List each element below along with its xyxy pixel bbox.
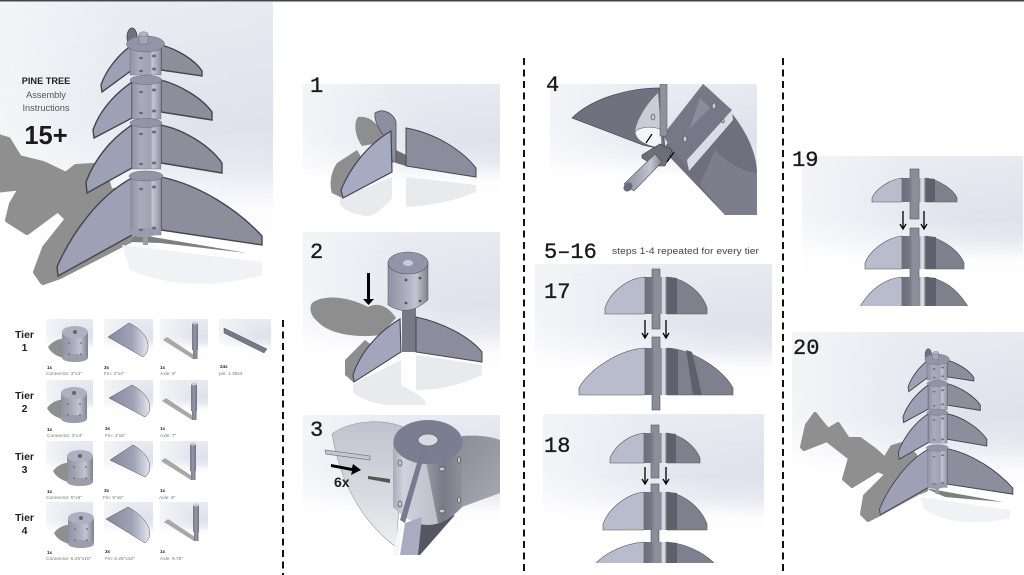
middle tier: [603, 484, 707, 544]
part captions: 1x: [47, 427, 53, 432]
row 2 parts: [46, 380, 208, 423]
small arrows: [646, 134, 674, 162]
part captions: 1x: [160, 365, 166, 370]
front fin edge strip: [400, 462, 422, 523]
panel: step 2: [303, 232, 500, 407]
6x label: 6x: [334, 474, 350, 490]
part captions: Axle: 9.75": [160, 556, 183, 562]
title block: Assembly: [26, 90, 66, 100]
arrow: down: [363, 273, 374, 305]
pine tree model: [880, 349, 1013, 515]
parts list: [15, 319, 271, 562]
tier 1 label: 1: [22, 342, 28, 354]
left back fin: [332, 422, 405, 547]
fin strip: [660, 84, 667, 136]
panel: step 1: [303, 74, 500, 223]
part captions: Connector: 6.25"x10": [46, 556, 92, 562]
part captions: Fin: 3"x4": [104, 371, 125, 377]
floor reflection: [122, 245, 262, 284]
part captions: Fin: 5"x6": [103, 495, 124, 501]
part captions: Fin: 4"x5": [105, 433, 126, 439]
cylinder body: [663, 84, 732, 167]
tier 4 label: Tier: [15, 512, 34, 524]
front fin white sliver: [393, 528, 400, 555]
part captions: 1x: [47, 550, 53, 555]
part captions: 1x: [160, 488, 166, 493]
arrows: [642, 320, 669, 338]
panel: step 18: [543, 414, 764, 570]
part captions: 1x: [47, 365, 53, 370]
step 5-16 heading: steps 1-4 repeated for every tier: [612, 246, 760, 257]
left fin: [572, 88, 665, 150]
step number: 3: [310, 418, 323, 443]
panel: step 20: [792, 332, 1024, 533]
part captions: pin: 1.35x3: [219, 371, 243, 377]
upper tier: [610, 425, 700, 478]
right fin: [416, 317, 482, 362]
row 1 parts: [46, 319, 271, 362]
shadows: [331, 117, 384, 198]
left fin: [353, 319, 401, 382]
step number: 20: [793, 336, 819, 361]
step 5-16 heading: 5–16: [544, 240, 597, 265]
inner vertical fin: [402, 300, 416, 352]
part captions: 3x: [104, 488, 110, 493]
step number: 4: [546, 73, 559, 98]
axle: [624, 154, 662, 191]
shadow: [310, 297, 396, 382]
lower right fin: [663, 84, 757, 215]
tier 2 label: 2: [22, 403, 28, 415]
arrows: [900, 211, 927, 229]
front fin face: [400, 517, 422, 555]
tier 3 label: Tier: [15, 451, 34, 463]
pine tree model: [57, 28, 262, 276]
title block: PINE TREE: [22, 76, 70, 86]
title block: Instructions: [23, 103, 70, 113]
reflections: [340, 177, 476, 216]
panel: step 3: [303, 415, 500, 555]
upper tier: [605, 269, 707, 329]
part captions: Fin: 6.25"x10": [105, 556, 135, 562]
step number: 1: [310, 74, 323, 99]
arrows: [642, 467, 669, 484]
pin: [325, 450, 370, 460]
tier 1 label: Tier: [15, 329, 34, 341]
part captions: 24x: [220, 364, 228, 369]
middle tier: [865, 228, 964, 278]
step number: 2: [310, 240, 323, 265]
top border: [0, 0, 1024, 2]
floor reflection: [920, 497, 1010, 522]
panel: finished pine tree hero: [0, 2, 273, 300]
upper tier: [872, 169, 957, 219]
lower tier: [596, 542, 714, 563]
panel: step 17: [535, 264, 772, 413]
cylinder: [393, 442, 462, 525]
lower tier: [860, 276, 968, 306]
part captions: Connector: 5"x6": [46, 495, 82, 501]
tree shadow: [802, 414, 926, 520]
hole shadow: [368, 476, 390, 483]
part captions: 3x: [104, 365, 110, 370]
title block: [22, 76, 70, 150]
right fin shadow: [925, 488, 1003, 502]
title block: 15+: [24, 122, 68, 150]
row 4 parts: [46, 502, 208, 548]
tier 4 label: 4: [22, 525, 28, 537]
right fin shadow: [130, 236, 246, 253]
part captions: Connector: 3"x4": [47, 433, 83, 439]
part captions: 1x: [47, 489, 53, 494]
panel: step 4: [546, 73, 757, 215]
left fin: [341, 131, 392, 198]
reflection: [353, 355, 482, 405]
light cylinder interior: [635, 93, 662, 140]
step number: 18: [544, 434, 570, 459]
pin bits: [642, 144, 672, 166]
connector cylinder: [388, 263, 428, 310]
part captions: Axle: 8": [159, 495, 176, 501]
part captions: 3x: [105, 549, 111, 554]
part captions: Connector: 3"x4": [46, 371, 82, 377]
part captions: Axle: 7": [160, 433, 177, 439]
tier 3 label: 3: [22, 464, 28, 476]
part captions: Axle: 6": [160, 371, 177, 377]
panel: step 19: [792, 148, 1023, 310]
arrow: right: [331, 464, 361, 475]
part captions: 3x: [105, 426, 111, 431]
tree shadow: [0, 136, 130, 282]
back fin: [375, 111, 396, 162]
lower dark wedge: [418, 515, 455, 555]
right fin: [406, 128, 476, 177]
right fin: [462, 436, 500, 507]
part captions: 1x: [160, 426, 166, 431]
tier 2 label: Tier: [15, 390, 34, 402]
step 5-16 heading: [544, 240, 760, 265]
part captions: 1x: [160, 549, 166, 554]
step number: 17: [544, 280, 570, 305]
step number: 19: [792, 148, 818, 173]
row 3 parts: [46, 441, 208, 486]
part captions: [46, 364, 243, 562]
dashed dividers: [283, 58, 783, 575]
lower tier: [579, 337, 733, 410]
